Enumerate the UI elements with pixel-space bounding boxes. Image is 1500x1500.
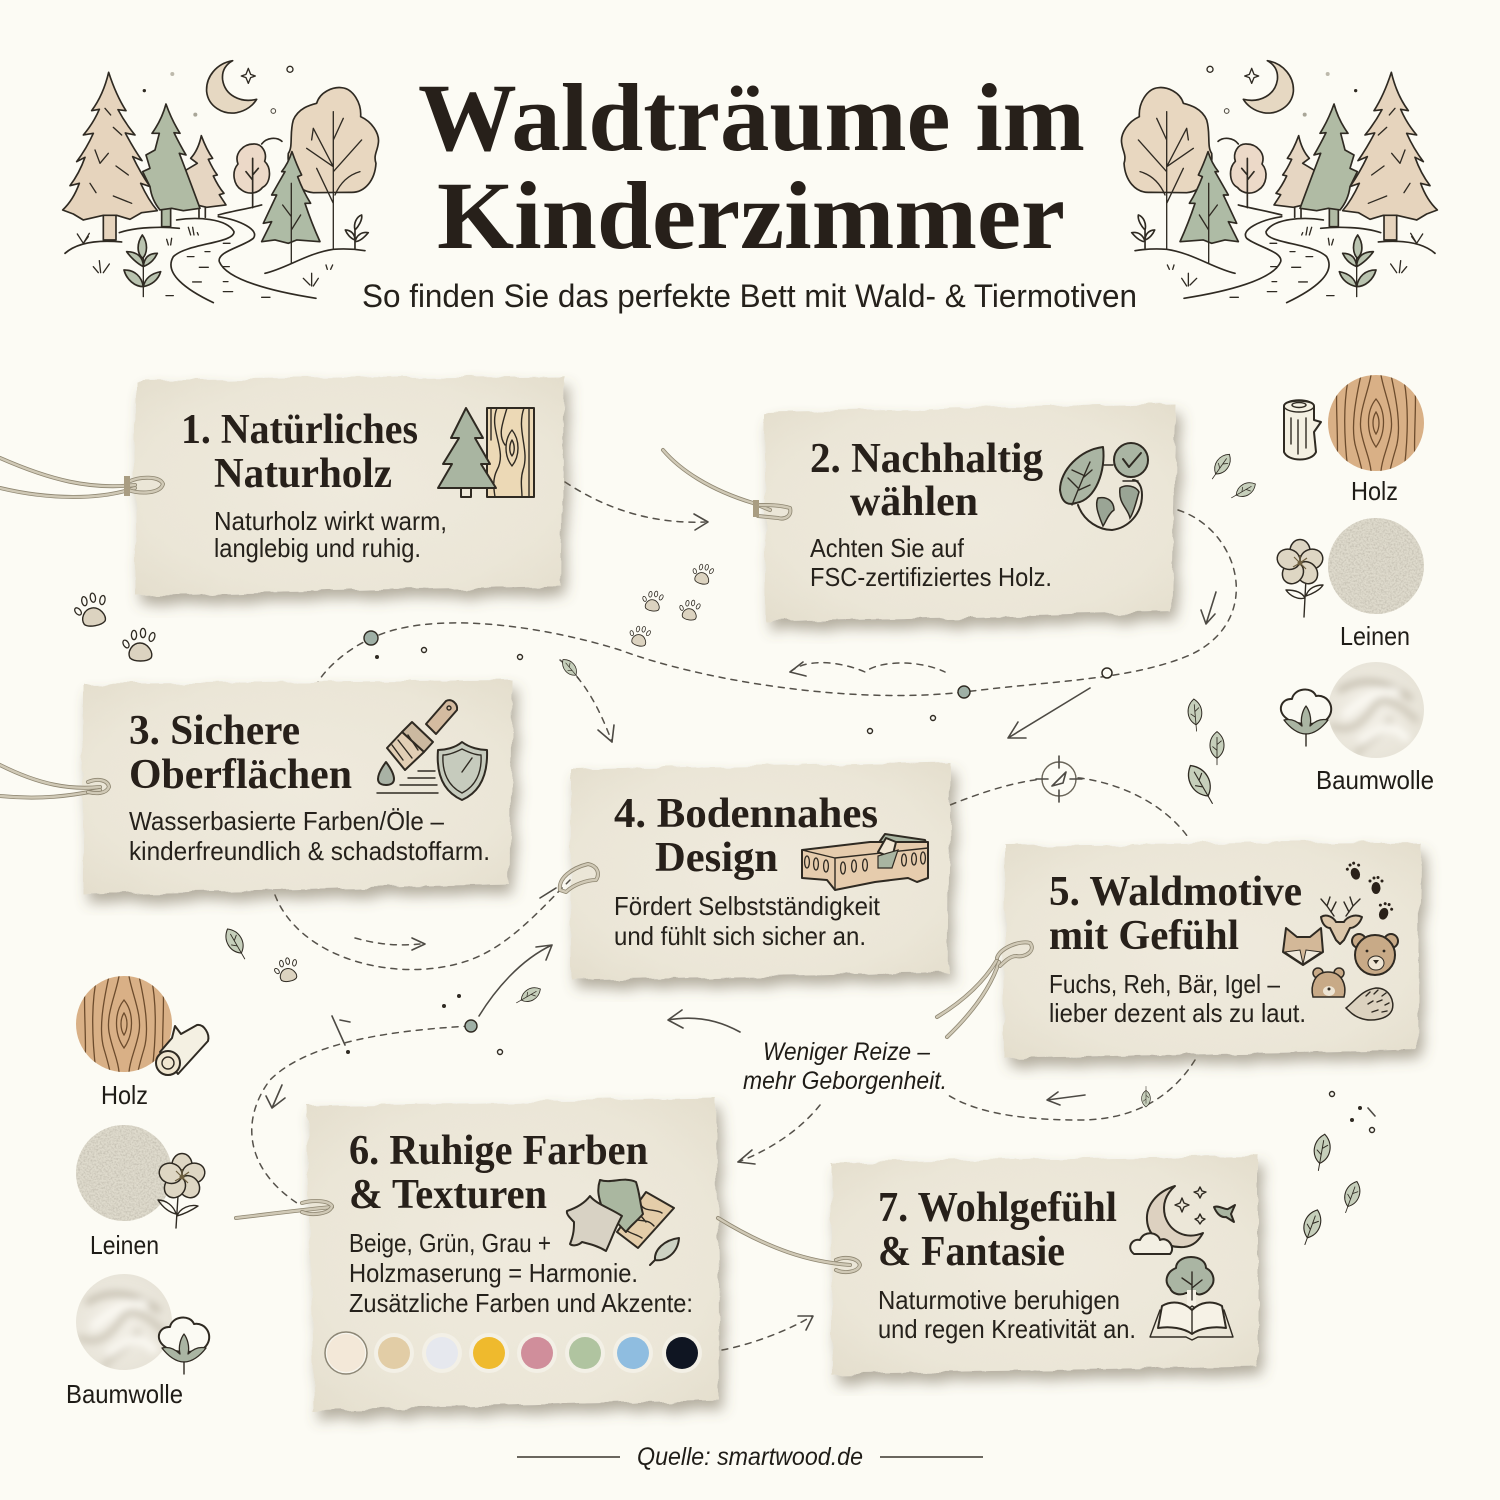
- icon: moon, cloud and open book: [1130, 1186, 1235, 1340]
- card 3 text: [129, 806, 490, 866]
- card 2 heading: wählen: [850, 479, 978, 525]
- icon: flax flower: [1275, 540, 1325, 617]
- title: Kinderzimmer: [437, 162, 1065, 269]
- card 3 text: Wasserbasierte Farben/Öle –: [129, 806, 444, 836]
- card 7 text: [878, 1285, 1136, 1344]
- icon: low floor bed: [802, 834, 928, 890]
- material: Baumwolle left: Baumwolle: [66, 1379, 183, 1409]
- icon: cotton boll left: [159, 1318, 209, 1374]
- icon: tree and wood plank: [438, 408, 534, 497]
- card 7 heading: 7. Wohlgefühl: [878, 1185, 1117, 1231]
- small bear head: [1312, 968, 1345, 997]
- card 3 string: [0, 765, 109, 798]
- card 5 text: lieber dezent als zu laut.: [1049, 998, 1306, 1028]
- icon: brush, drop and shield: [377, 700, 487, 800]
- card 1 heading: [181, 407, 418, 497]
- card 3 heading: Oberflächen: [129, 752, 352, 798]
- deer head: [1321, 897, 1362, 944]
- animal paw prints: [71, 561, 715, 984]
- material: Baumwolle right: Baumwolle: [1316, 765, 1434, 795]
- icon: fabric swatches: [567, 1180, 679, 1265]
- card 6 text: Holzmaserung = Harmonie.: [349, 1258, 638, 1288]
- material: Leinen right: Leinen: [1340, 621, 1410, 651]
- card 6 heading: & Texturen: [349, 1172, 547, 1218]
- card 7 text: und regen Kreativität an.: [878, 1314, 1136, 1344]
- header illustration: forest left: [63, 61, 379, 303]
- panel: card 4: [540, 762, 950, 980]
- card 6 heading: 6. Ruhige Farben: [349, 1128, 648, 1174]
- material: Holz right: Holz: [1351, 476, 1398, 506]
- callout: [743, 1038, 947, 1095]
- panel: card 5: [937, 841, 1420, 1058]
- material: Holz left: Holz: [101, 1080, 148, 1110]
- card 2 heading: [810, 436, 1043, 525]
- panel: card 7: [718, 1156, 1258, 1374]
- card 6 text: Zusätzliche Farben und Akzente:: [349, 1288, 693, 1318]
- card 3 heading: [129, 708, 352, 798]
- panel: card 2: [663, 404, 1176, 622]
- card 5 text: Fuchs, Reh, Bär, Igel –: [1049, 969, 1280, 999]
- card 3 heading: 3. Sichere: [129, 708, 300, 754]
- card 5 heading: mit Gefühl: [1049, 913, 1239, 959]
- card 6 heading: [349, 1128, 648, 1218]
- material: Leinen left: Leinen: [90, 1230, 159, 1260]
- card 5 text: [1049, 969, 1306, 1028]
- icon: log left: [156, 1025, 208, 1075]
- card 1 heading: Naturholz: [214, 451, 392, 497]
- bear head: [1352, 934, 1398, 975]
- dashed connector paths: [252, 482, 1236, 1350]
- callout: Weniger Reize –: [763, 1038, 931, 1066]
- card 4 string: [540, 864, 598, 898]
- card 2 text: FSC-zertifiziertes Holz.: [810, 562, 1052, 592]
- card 3 text: kinderfreundlich & schadstoffarm.: [129, 836, 490, 866]
- card 5 string: [937, 942, 1032, 1037]
- card 2 string: [663, 450, 790, 519]
- panel: card 6: [236, 1098, 720, 1410]
- title: [418, 64, 1085, 269]
- subtitle: So finden Sie das perfekte Bett mit Wald- & Tiermotiven: [362, 278, 1137, 314]
- card 7 string: [718, 1218, 860, 1272]
- card 6 text: [349, 1228, 693, 1318]
- card 4 text: Fördert Selbstständigkeit: [614, 891, 881, 921]
- icon: forest animals: [1283, 860, 1398, 1020]
- card 5 heading: [1049, 869, 1302, 959]
- fox head: [1283, 928, 1323, 965]
- card 6 string: [236, 1201, 332, 1218]
- hedgehog: [1346, 988, 1393, 1020]
- card 2 text: Achten Sie auf: [810, 533, 965, 563]
- material: Baumwolle right: [1281, 662, 1434, 795]
- material: Holz right: [1284, 375, 1424, 506]
- card 4 text: und fühlt sich sicher an.: [614, 921, 866, 951]
- card 1 string: [0, 458, 163, 497]
- icon: flax flower left: [157, 1154, 207, 1228]
- panel: card 1: [0, 376, 565, 596]
- card 7 heading: [878, 1185, 1117, 1275]
- compass mark: [1036, 756, 1082, 802]
- card 4 heading: [614, 791, 878, 881]
- icon: cotton boll: [1281, 690, 1331, 746]
- card 7 heading: & Fantasie: [878, 1229, 1065, 1275]
- color swatches: [325, 1332, 702, 1374]
- icon: log: [1284, 400, 1321, 460]
- material: Leinen right: [1275, 518, 1424, 651]
- path nodes and dots: [332, 631, 1375, 1132]
- header illustration: forest right: [1121, 61, 1437, 303]
- card 4 heading: Design: [655, 835, 778, 881]
- card 1 text: [214, 506, 447, 563]
- card 2 heading: 2. Nachhaltig: [810, 436, 1043, 482]
- card 5 heading: 5. Waldmotive: [1049, 869, 1302, 915]
- card 1 text: Naturholz wirkt warm,: [214, 506, 447, 536]
- card 1 heading: 1. Natürliches: [181, 407, 418, 453]
- icon: leaf and globe: [1060, 443, 1148, 530]
- callout: mehr Geborgenheit.: [743, 1067, 947, 1095]
- material: Leinen left: [76, 1125, 207, 1260]
- source line: Quelle: smartwood.de: [637, 1443, 863, 1471]
- card 6 text: Beige, Grün, Grau +: [349, 1228, 551, 1258]
- card 7 text: Naturmotive beruhigen: [878, 1285, 1120, 1315]
- card 1 text: langlebig und ruhig.: [214, 533, 421, 563]
- material: Baumwolle left: [66, 1274, 209, 1409]
- panel: card 3: [0, 680, 512, 894]
- scattered leaves: [221, 451, 1364, 1247]
- card 2 text: [810, 533, 1052, 592]
- title: Waldträume im: [418, 64, 1085, 171]
- card 4 text: [614, 891, 881, 951]
- material: Holz left: [76, 976, 208, 1110]
- card 4 heading: 4. Bodennahes: [614, 791, 878, 837]
